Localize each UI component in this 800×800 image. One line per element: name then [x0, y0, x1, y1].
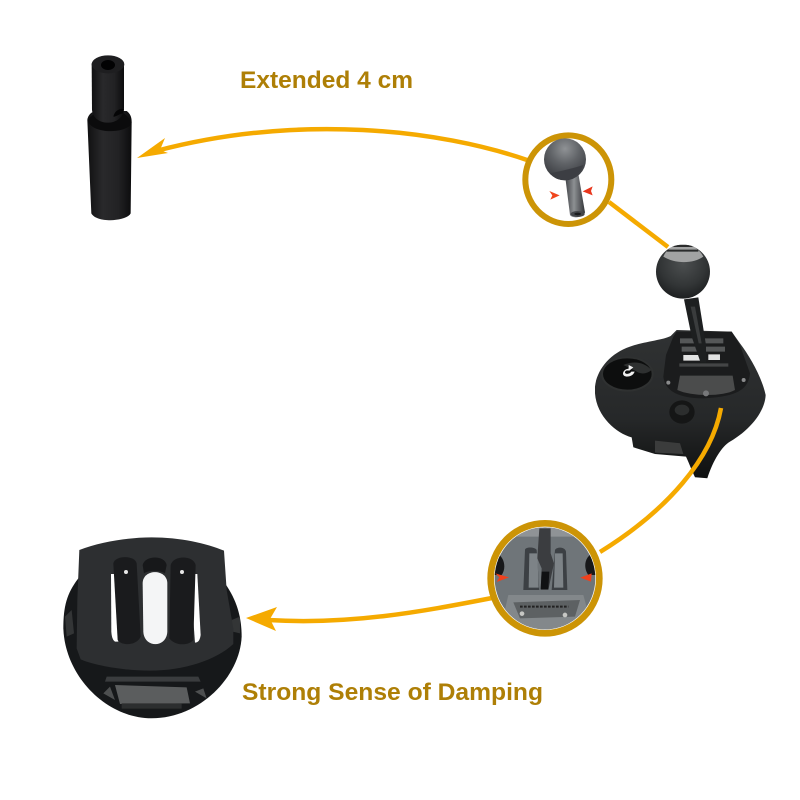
heading: Extended 4 cm: Extended 4 cm [240, 67, 413, 94]
white slot centre [143, 572, 167, 644]
red marker right [580, 573, 592, 582]
dark rail centre top [143, 557, 167, 573]
label recess [115, 685, 190, 704]
dark rail right [169, 557, 196, 644]
arrow: knob detail to extension rod [137, 129, 527, 160]
lever shaft [684, 297, 706, 363]
metal knob ball [544, 138, 586, 180]
lower clamp [655, 441, 683, 454]
shifter knob [656, 245, 710, 299]
slot right [552, 548, 567, 590]
red marker right [583, 186, 593, 195]
round lower body [63, 578, 242, 718]
dark rail left [113, 557, 141, 644]
detail ring: knob with red squeeze markers [525, 135, 611, 224]
icon: gear shifter [595, 244, 766, 478]
gold ring [525, 135, 611, 224]
gold ring [491, 523, 599, 633]
icon: black extension rod [87, 55, 132, 220]
logo dial [602, 357, 653, 391]
red marker left [549, 191, 560, 200]
top plate [77, 537, 233, 671]
connector: shifter knob to upper detail ring [609, 202, 668, 247]
shifter base body [595, 330, 766, 478]
heading: Strong Sense of Damping: Strong Sense of Damping [242, 679, 543, 706]
detail ring: damping close-up with red markers [490, 523, 600, 633]
knob stem tip [571, 211, 585, 217]
arrow: lower detail ring to damping puck [246, 598, 492, 631]
label plate [513, 600, 580, 618]
white slot right [190, 574, 201, 643]
knob stem [565, 174, 585, 217]
white slot left [111, 574, 118, 642]
close-up background [494, 527, 596, 630]
slot left [523, 547, 539, 590]
gate plate [663, 332, 750, 398]
icon: black damping puck [63, 537, 242, 718]
rear rough cover [677, 376, 735, 395]
arrow: shifter base to lower detail ring [600, 408, 721, 552]
lever [537, 528, 554, 590]
round button [669, 400, 695, 424]
red marker left [495, 573, 509, 582]
